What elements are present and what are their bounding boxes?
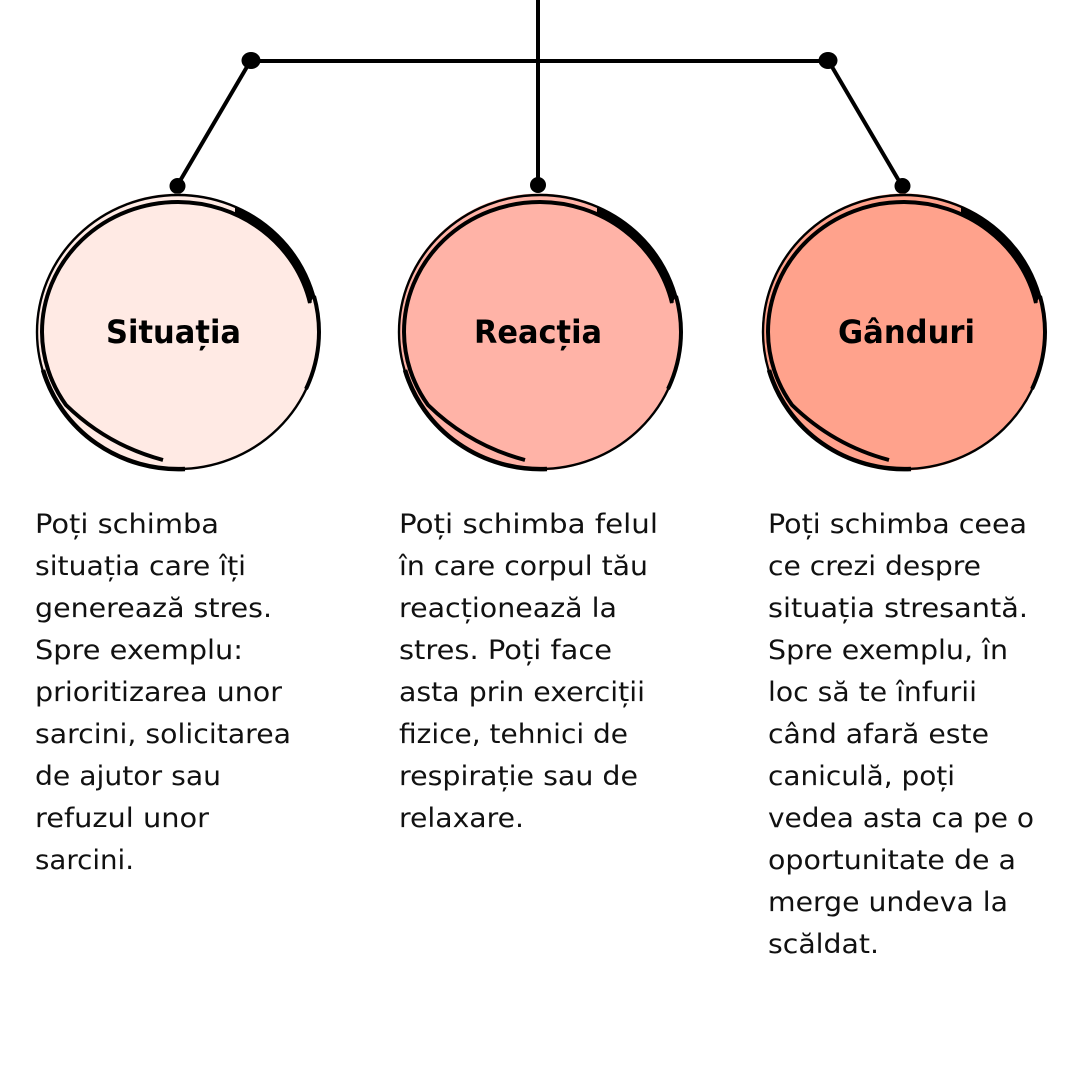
text block: Situația description: Spre exemplu: — [35, 635, 243, 666]
circle: Reacția — [398, 194, 681, 470]
text block: Situația description: refuzul unor — [35, 803, 209, 834]
text block: Reacția description: stres. Poți face — [399, 635, 612, 666]
circle: Gânduri: Gânduri — [838, 313, 975, 351]
text block: Situația description: generează stres. — [35, 593, 272, 624]
text block: Gânduri description: caniculă, poți — [768, 761, 955, 792]
text block: Reacția description — [398, 509, 658, 834]
text block: Situația description: Poți schimba — [35, 509, 219, 540]
text block: Situația description — [35, 509, 291, 876]
text block: Gânduri description: Poți schimba ceea — [768, 509, 1027, 540]
circle: Situația: Situația — [106, 313, 241, 351]
text block: Situația description: de ajutor sau — [35, 761, 221, 792]
circle: Gânduri — [763, 194, 1045, 470]
text block: Gânduri description: situația stresantă. — [768, 593, 1028, 624]
text block: Gânduri description: loc să te înfurii — [768, 677, 977, 708]
text block: Reacția description: relaxare. — [399, 803, 524, 834]
text block: Reacția description: reacționează la — [399, 593, 617, 624]
text block: Situația description: sarcini. — [35, 845, 134, 876]
text block: Gânduri description: ce crezi despre — [768, 551, 981, 582]
text block: Situația description: prioritizarea unor — [35, 677, 282, 708]
circle: Situația — [36, 194, 319, 470]
text block: Gânduri description: scăldat. — [768, 929, 879, 960]
text block: Reacția description: fizice, tehnici de — [399, 719, 628, 750]
text block: Reacția description: Poți schimba felul — [399, 509, 658, 540]
text block: Reacția description: asta prin exerciții — [399, 677, 645, 708]
text block: Gânduri description: oportunitate de a — [768, 845, 1016, 876]
text block: Situația description: situația care îți — [35, 551, 246, 582]
text block: Gânduri description: Spre exemplu, în — [768, 635, 1008, 666]
connector: top bracket — [170, 0, 910, 194]
text block: Gânduri description: când afară este — [768, 719, 989, 750]
text block: Gânduri description — [768, 509, 1034, 960]
text block: Reacția description: respirație sau de — [399, 761, 638, 792]
circle: Reacția: Reacția — [474, 313, 602, 351]
text block: Situația description: sarcini, solicitarea — [35, 719, 291, 750]
text block: Gânduri description: merge undeva la — [768, 887, 1008, 918]
text block: Reacția description: în care corpul tău — [398, 551, 648, 582]
text block: Gânduri description: vedea asta ca pe o — [768, 803, 1034, 834]
